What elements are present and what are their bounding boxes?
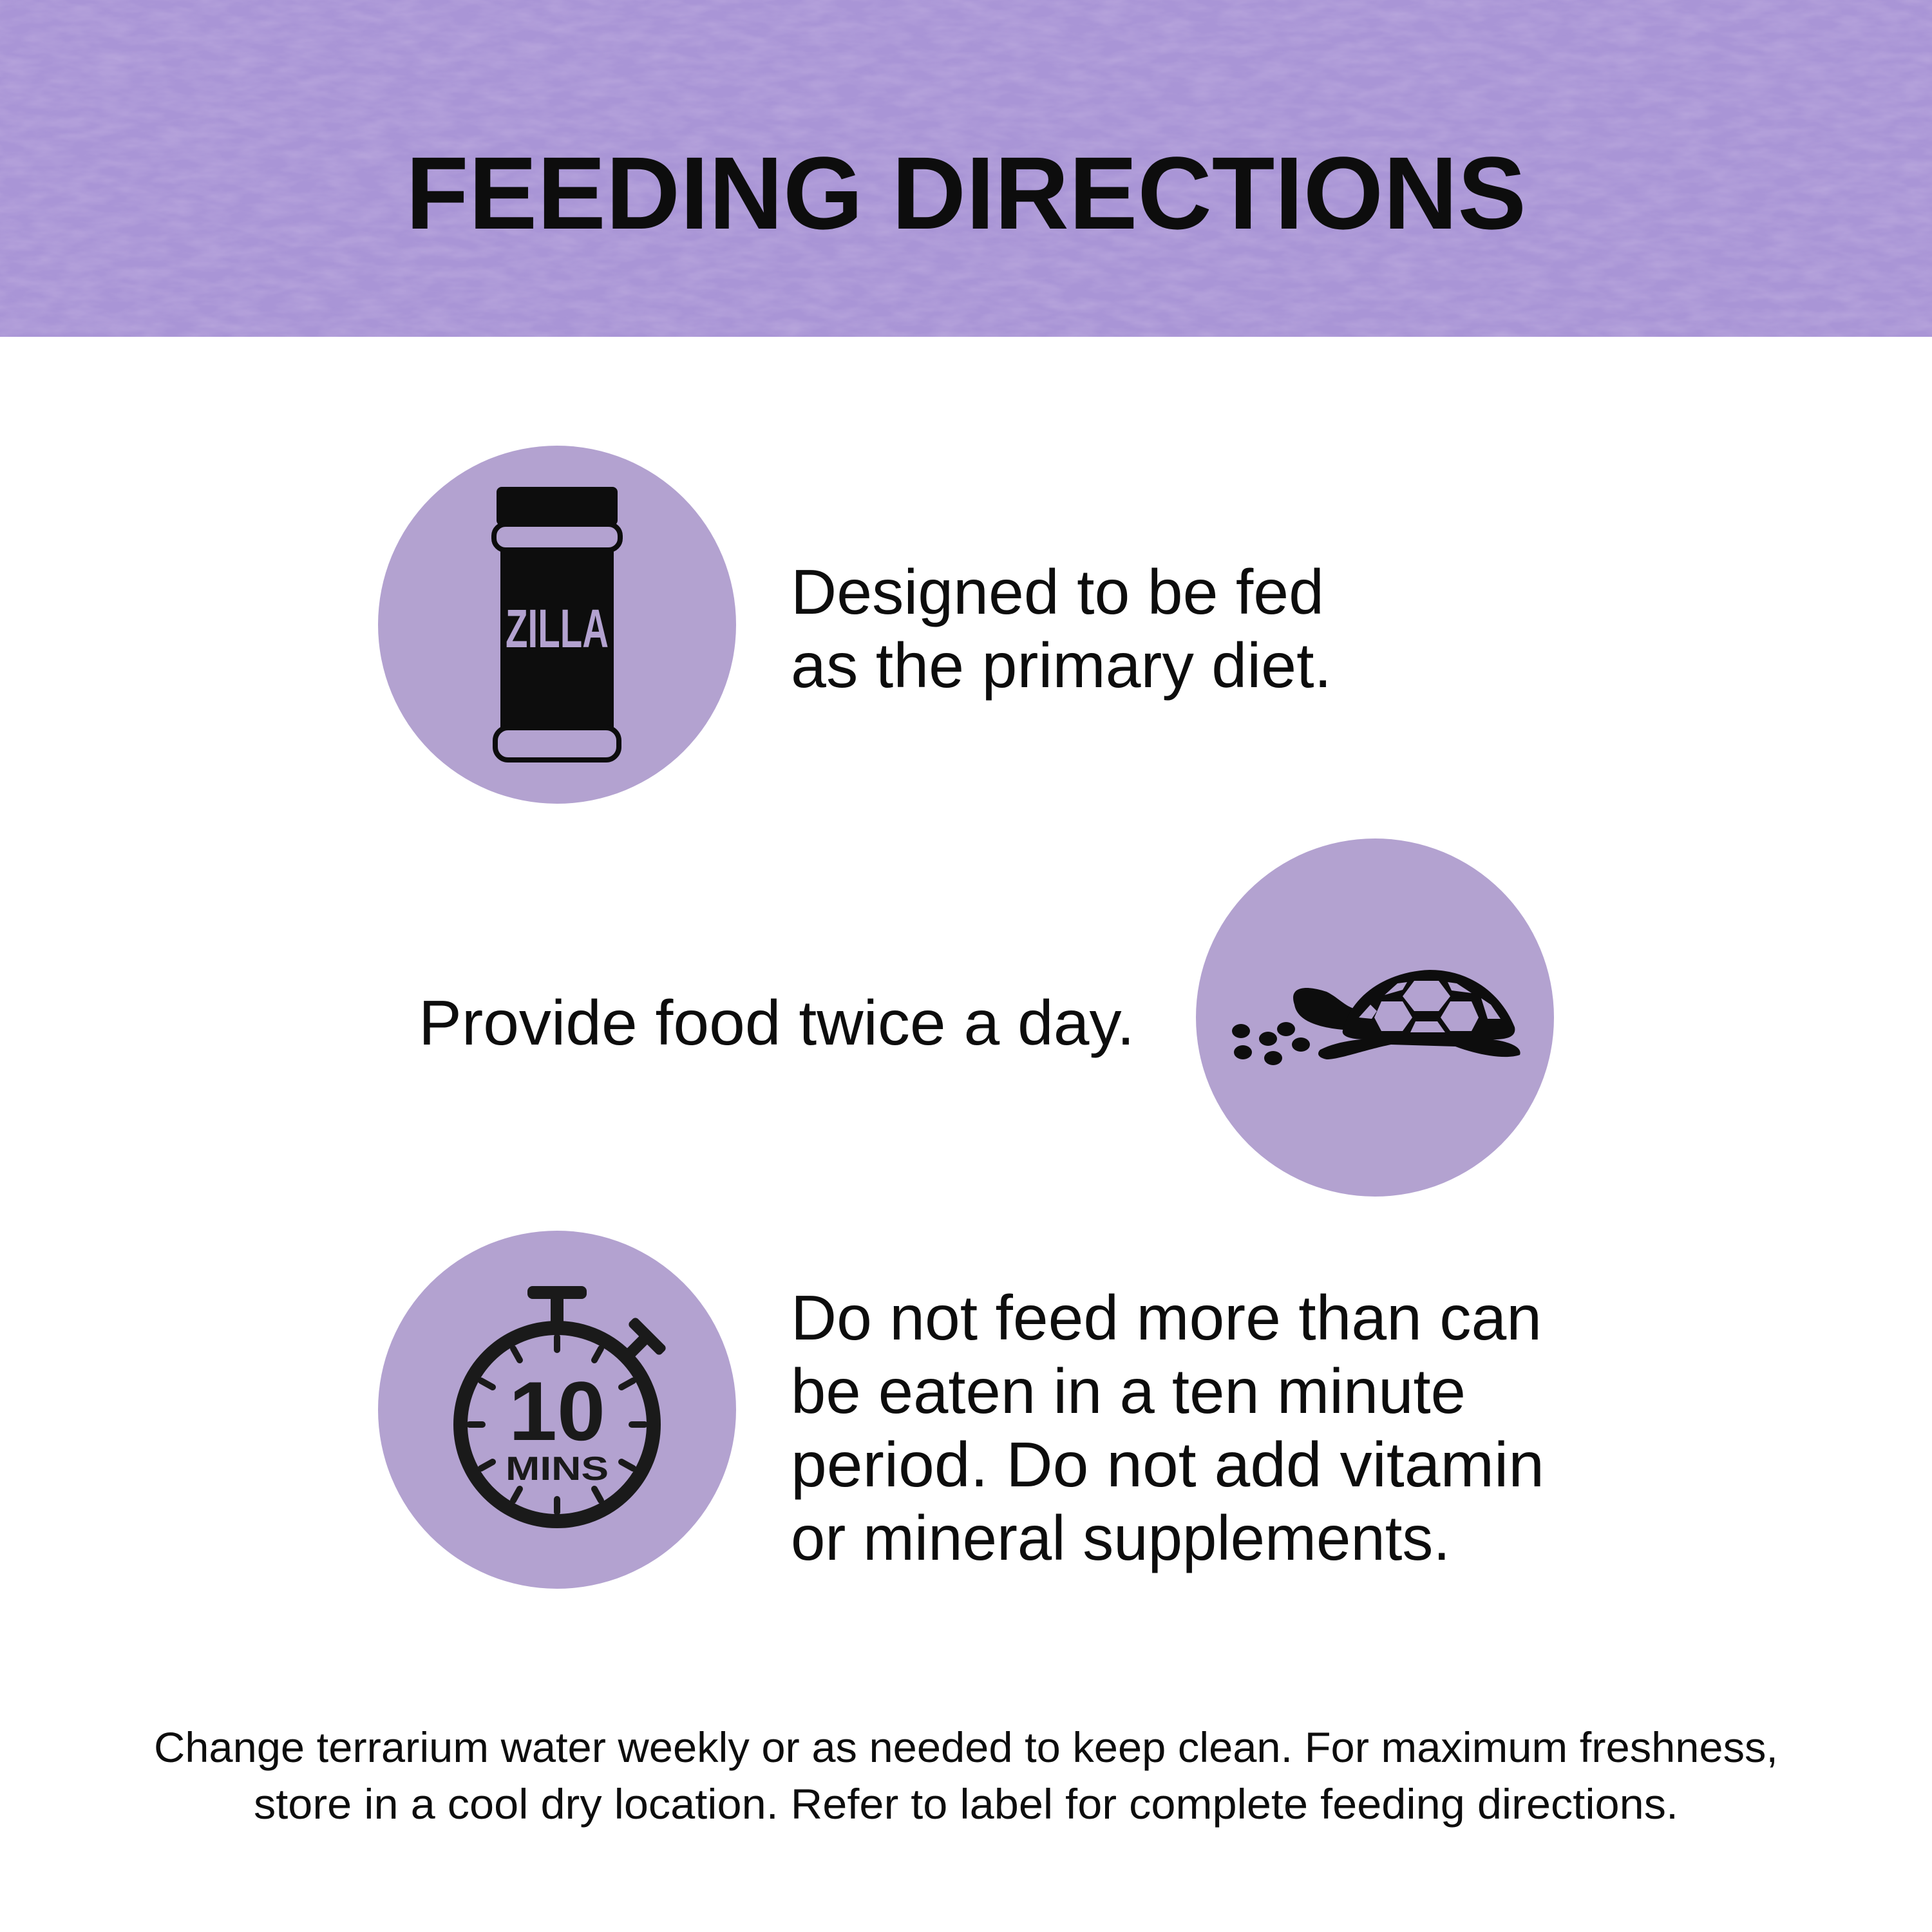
icon: stopwatch bbox=[378, 1231, 736, 1589]
panel: twice a day bbox=[419, 838, 1554, 1197]
icon: turtle with pellets bbox=[1196, 838, 1554, 1197]
text: ten minutes: or mineral supplements. bbox=[791, 1502, 1450, 1573]
text: ten minutes: period. Do not add vitamin bbox=[791, 1429, 1544, 1500]
text: primary diet: Designed to be fed bbox=[791, 556, 1324, 627]
icon: food container: ZILLA bbox=[506, 598, 609, 659]
footer note: store in a cool dry location. Refer to label for complete feeding directions. bbox=[254, 1780, 1678, 1828]
icon: stopwatch: MINS bbox=[506, 1450, 609, 1488]
panel: ten minutes bbox=[378, 1231, 1544, 1589]
text: twice a day: Provide food twice a day. bbox=[419, 987, 1135, 1058]
title: FEEDING DIRECTIONS bbox=[406, 135, 1526, 251]
header band bbox=[0, 0, 1932, 337]
icon: food container bbox=[378, 446, 736, 804]
footer note: Change terrarium water weekly or as needed to keep clean. For maximum freshness, bbox=[154, 1723, 1778, 1771]
text: ten minutes: be eaten in a ten minute bbox=[791, 1356, 1466, 1426]
text: primary diet: as the primary diet. bbox=[791, 630, 1332, 701]
panel: primary diet bbox=[378, 446, 1332, 804]
icon: stopwatch: 10 bbox=[509, 1364, 605, 1458]
text: ten minutes: Do not feed more than can bbox=[791, 1282, 1542, 1353]
